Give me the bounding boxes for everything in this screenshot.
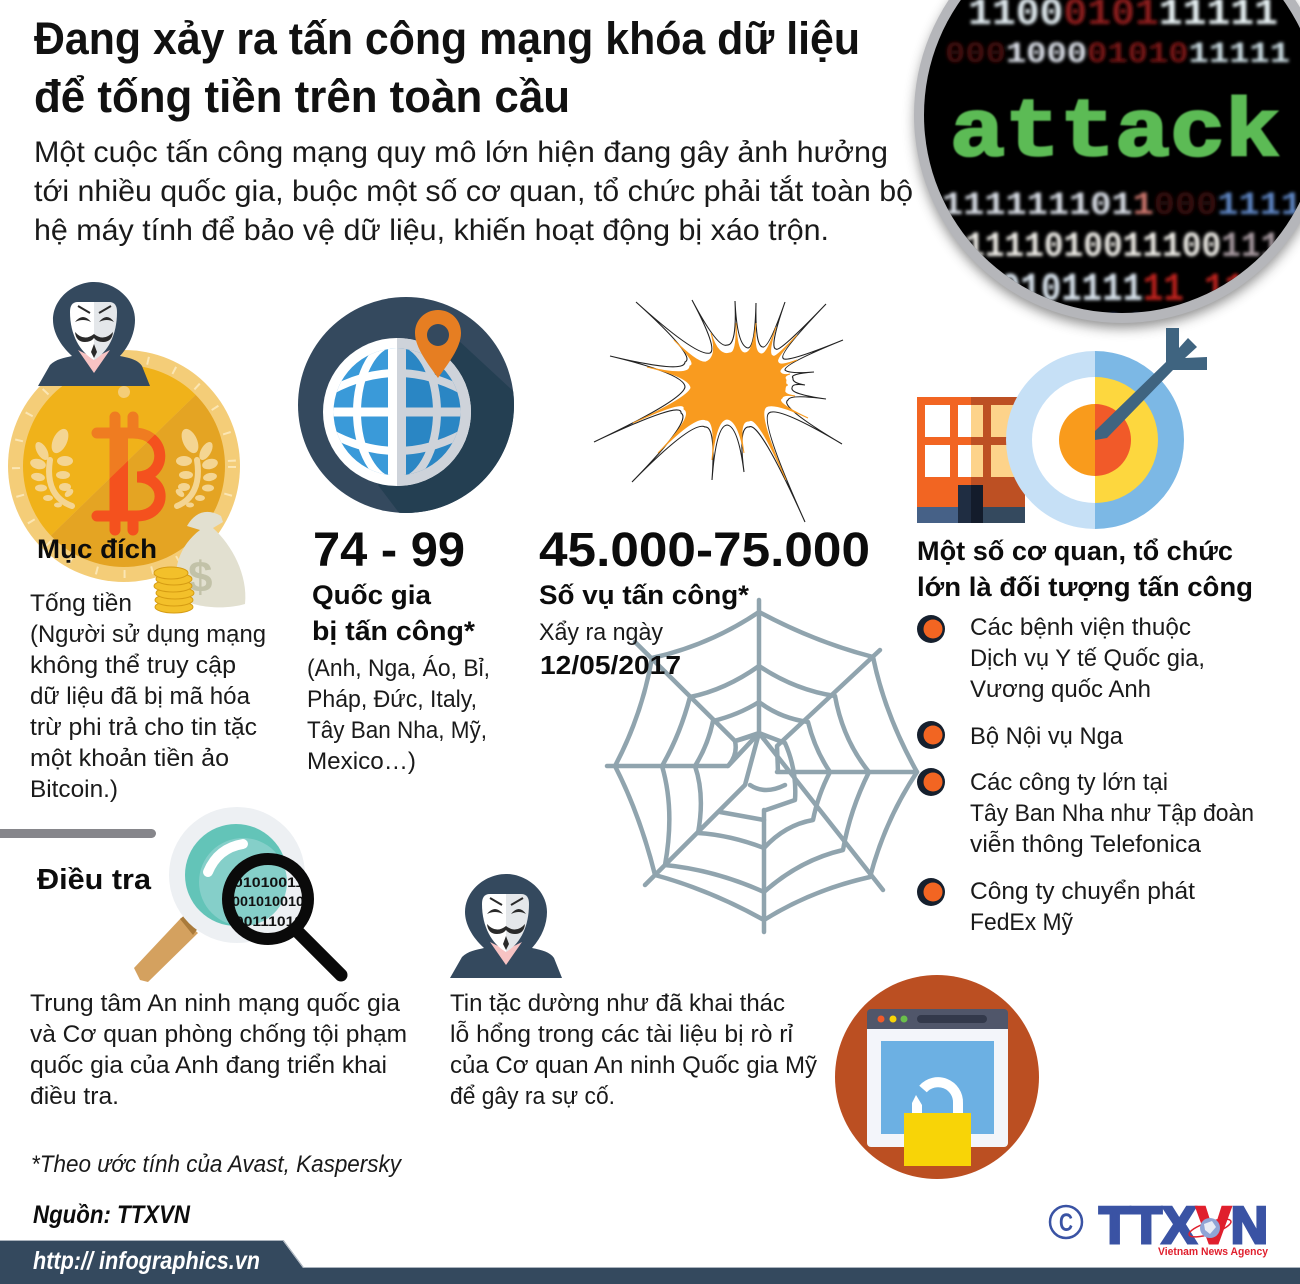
intro text: hệ máy tính để bảo vệ dữ liệu, khiến hoạt động bị xáo trộn. (34, 214, 829, 247)
text: exploit: lỗ hổng trong các tài liệu bị rò rỉ (450, 1021, 794, 1048)
number: 45.000-75.000: 45.000-75.000 (539, 524, 870, 577)
source: Nguồn: TTXVN (33, 1201, 191, 1229)
icon: right wreath (174, 426, 219, 508)
intro text: Một cuộc tấn công mạng quy mô lớn hiện đang gây ảnh hưởng (34, 136, 888, 169)
icon: target with arrow (1006, 328, 1207, 529)
heading: number of attacks: Số vụ tấn công* (539, 580, 749, 610)
item: Spanish companies: Các công ty lớn tại (970, 769, 1168, 796)
icon: attack magnifier lens: 0001000 01010 11111 (945, 38, 1290, 72)
item: FedEx: FedEx Mỹ (970, 909, 1073, 936)
item: Spanish companies: viễn thông Telefonica (970, 831, 1202, 858)
panel: countries (298, 297, 525, 775)
item: Russia ministry (917, 721, 1124, 750)
item: Russia ministry: Bộ Nội vụ Nga (970, 723, 1124, 750)
text: exploit: để gây ra sự cố. (450, 1083, 615, 1110)
title: để tống tiền trên toàn cầu (34, 71, 570, 122)
item: hospitals: Vương quốc Anh (970, 676, 1151, 703)
icon: explosion burst (594, 300, 843, 522)
icon: money bag (154, 512, 245, 613)
text: purpose: trừ phi trả cho tin tặc (30, 714, 257, 741)
text: investigation: điều tra. (30, 1083, 119, 1110)
icon: magnifiers: 00111010 (235, 913, 303, 929)
text: exploit: Tin tặc dường như đã khai thác (450, 990, 785, 1017)
icon: left wreath (29, 426, 75, 508)
text: purpose: một khoản tiền ảo (30, 745, 229, 772)
text: purpose (30, 590, 266, 803)
item: Spanish companies (917, 768, 1254, 858)
icon: hacker (450, 874, 562, 978)
icon: magnifiers: 01010011 (234, 874, 304, 890)
heading: countries attacked: bị tấn công* (312, 616, 476, 646)
icon: attack magnifier lens (914, 0, 1300, 335)
icon: locked browser (835, 975, 1039, 1179)
item: hospitals (917, 614, 1205, 703)
item: hospitals: Các bệnh viện thuộc (970, 614, 1191, 641)
text: country list: Tây Ban Nha, Mỹ, (307, 717, 487, 744)
heading: countries attacked (312, 580, 476, 646)
text: purpose: Tống tiền (30, 590, 132, 617)
footnote: *Theo ước tính của Avast, Kaspersky (31, 1151, 403, 1178)
panel: purpose (8, 282, 266, 803)
icon: magnifiers (134, 807, 341, 982)
item: FedEx (917, 878, 1195, 936)
heading: countries attacked: Quốc gia (312, 580, 432, 610)
text: country list (307, 655, 490, 775)
text: purpose: không thể truy cập (30, 652, 236, 679)
icon: building (917, 397, 1025, 523)
intro text (34, 136, 913, 247)
text: country list: (Anh, Nga, Áo, Bỉ, (307, 655, 490, 682)
text: investigation (30, 990, 407, 1110)
heading: targets: Một số cơ quan, tổ chức (917, 536, 1233, 566)
title (34, 13, 860, 122)
icon: bitcoin coin (8, 350, 240, 582)
icon: hacker (38, 282, 150, 386)
title: Đang xảy ra tấn công mạng khóa dữ liệu (34, 13, 860, 64)
heading: targets (917, 536, 1253, 602)
icon: attack magnifier lens: 11110100111001110 (965, 227, 1300, 267)
text: attack date: Xẩy ra ngày (539, 619, 663, 646)
panel: targets (917, 328, 1254, 936)
item: hospitals: Dịch vụ Y tế Quốc gia, (970, 645, 1205, 672)
icon: magnifiers: 001010010 (232, 893, 304, 909)
panel: hacker exploit (450, 874, 1039, 1179)
text: investigation: Trung tâm An ninh mạng quốc gia (30, 990, 401, 1017)
heading: targets: lớn là đối tượng tấn công (917, 572, 1253, 602)
text: exploit (450, 990, 817, 1110)
icon: attack magnifier lens: 111111101 10001111 (942, 187, 1300, 224)
logo: TTXVN (1048, 1204, 1268, 1258)
footer bar (0, 1240, 1300, 1284)
footer url: http:// infographics.vn (33, 1247, 260, 1275)
text: purpose: (Người sử dụng mạng (30, 621, 266, 648)
text: purpose: dữ liệu đã bị mã hóa (30, 683, 251, 710)
item: FedEx: Công ty chuyển phát (970, 878, 1195, 905)
logo: TTXVN: TTXVN (1099, 1197, 1268, 1255)
heading: Mục đích: Mục đích (37, 534, 157, 564)
text: purpose: Bitcoin.) (30, 776, 118, 803)
icon: money bag: $ (188, 553, 212, 602)
attack word: attack (950, 87, 1280, 180)
list: targets (917, 614, 1254, 936)
number: 74-99: 74 - 99 (313, 524, 465, 577)
panel: investigation (0, 807, 407, 1110)
icon: attack magnifier lens: 010111111 11 (1000, 268, 1245, 313)
logo: TTXVN: C (1059, 1209, 1073, 1237)
icon: spider web (607, 600, 917, 932)
text: country list: Pháp, Đức, Italy, (307, 686, 477, 713)
item: Spanish companies: Tây Ban Nha như Tập đoàn (970, 800, 1254, 827)
icon: attack magnifier lens: 010011 (1060, 310, 1190, 335)
text: investigation: quốc gia của Anh đang triển khai (30, 1052, 387, 1079)
text: attack date: 12/05/2017 (540, 650, 681, 680)
heading: Điều tra: Điều tra (37, 864, 152, 896)
text: investigation: và Cơ quan phòng chống tội phạm (30, 1021, 407, 1048)
logo: TTXVN: Vietnam News Agency (1158, 1246, 1269, 1258)
icon: globe with pin (298, 297, 514, 513)
text: attack date (539, 619, 681, 680)
text: exploit: của Cơ quan An ninh Quốc gia Mỹ (450, 1052, 817, 1079)
text: country list: Mexico…) (307, 748, 416, 775)
panel: attack count (539, 300, 917, 932)
intro text: tới nhiều quốc gia, buộc một số cơ quan, tổ chức phải tắt toàn bộ (34, 175, 913, 208)
